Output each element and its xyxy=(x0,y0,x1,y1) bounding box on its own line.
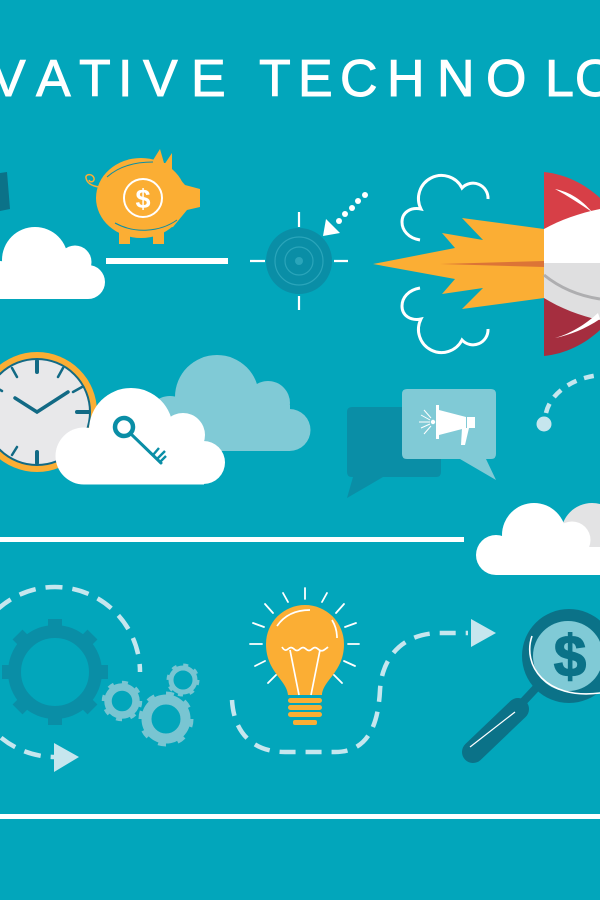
dashed circular arrow xyxy=(0,587,140,772)
icon: clock xyxy=(0,352,97,472)
icon: piggy bank: $ xyxy=(135,184,151,214)
icon: small gears xyxy=(104,665,198,744)
icon: piggy bank xyxy=(86,149,200,244)
cloud: gray behind xyxy=(561,503,600,565)
rocket flame xyxy=(373,218,544,309)
cloud: white with key xyxy=(56,388,225,484)
dashed S-curve arrow xyxy=(232,619,496,752)
icon: magnifying glass xyxy=(470,609,600,752)
dark shape at left edge xyxy=(0,172,10,211)
cloud: white right xyxy=(476,503,600,575)
white divider bottom xyxy=(0,814,600,819)
icon: light bulb xyxy=(250,588,359,725)
speech bubble: dark xyxy=(347,407,441,498)
dashed arc with dot xyxy=(536,375,600,432)
smoke cloud: bottom xyxy=(402,288,488,353)
rocket xyxy=(544,172,600,356)
arrow: dotted into target xyxy=(323,192,368,236)
cloud: top left xyxy=(0,227,105,299)
icon: target xyxy=(250,212,348,310)
icon: key xyxy=(115,418,166,463)
icon: large gear xyxy=(2,619,108,725)
speech bubble: light with megaphone xyxy=(402,389,496,480)
cloud: light blue xyxy=(146,355,310,451)
white divider middle xyxy=(0,537,464,542)
icon: magnifying glass: $ xyxy=(554,624,586,689)
white line under piggy xyxy=(106,258,228,264)
icon: megaphone xyxy=(419,405,475,445)
smoke cloud: top xyxy=(402,175,488,240)
